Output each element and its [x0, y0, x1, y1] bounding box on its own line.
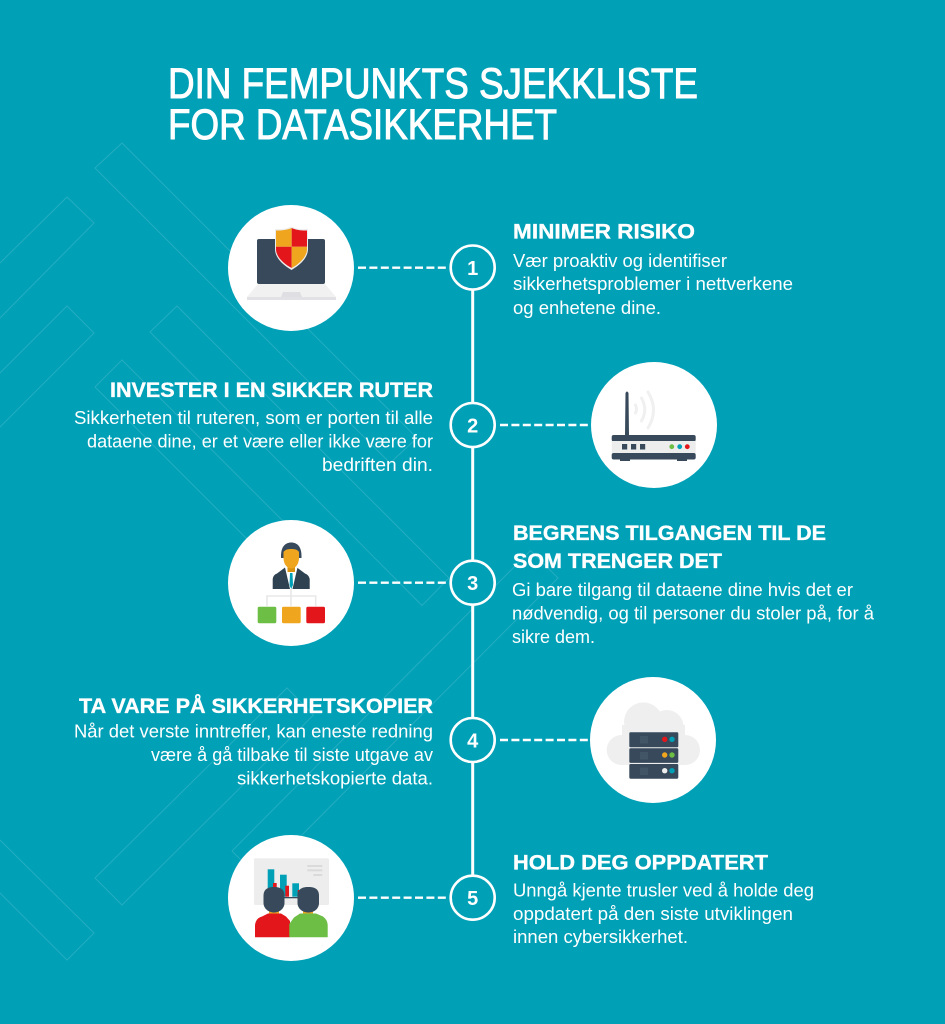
number badge 5: 5	[467, 888, 478, 910]
body: step 1	[513, 251, 793, 318]
number badge 3	[451, 561, 495, 605]
body: step 1: og enhetene dine.	[513, 298, 661, 318]
number badge 3: 3	[467, 573, 478, 595]
body: step 3: sikre dem.	[512, 627, 595, 647]
number badge 5	[451, 876, 495, 920]
heading: begrens tilgangen: BEGRENS TILGANGEN TIL DE	[513, 522, 826, 545]
timeline line	[471, 288, 474, 878]
number badge 4: 4	[467, 730, 479, 752]
body: step 2: bedriften din.	[322, 455, 433, 475]
body: step 1: sikkerhetsproblemer i nettverkene	[513, 274, 793, 294]
heading: begrens tilgangen: SOM TRENGER DET	[513, 550, 722, 573]
heading: invester i en sikker ruter: INVESTER I EN SIKKER RUTER	[110, 379, 433, 402]
step 5: text	[513, 851, 814, 947]
title: DIN FEMPUNKTS SJEKKLISTE	[168, 60, 698, 108]
number badge 1	[451, 246, 495, 290]
icon: manager with hierarchy	[228, 520, 354, 646]
body: step 4: være å gå tilbake til siste utgave av	[151, 745, 433, 765]
step 2 connector	[500, 424, 588, 426]
heading: ta vare på sikkerhetskopier: TA VARE PÅ SIKKERHETSKOPIER	[79, 694, 433, 718]
step 4: text	[74, 694, 433, 788]
body: step 3	[512, 580, 875, 647]
step 3 connector	[358, 582, 446, 584]
number badge 2: 2	[467, 416, 478, 438]
body: step 3: nødvendig, og til personer du stoler på, for å	[512, 604, 875, 624]
number badge 2	[451, 403, 495, 447]
body: step 1: Vær proaktiv og identifiser	[513, 251, 727, 271]
heading: minimer risiko: MINIMER RISIKO	[513, 220, 695, 244]
body: step 5: oppdatert på den siste utviklingen	[513, 904, 793, 924]
heading: begrens tilgangen	[513, 522, 826, 573]
icon: laptop with shield	[228, 205, 354, 331]
icon: cloud server	[590, 677, 716, 803]
title	[168, 60, 698, 149]
body: step 2: dataene dine, er et være eller ikke være for	[87, 432, 433, 452]
body: step 4	[74, 722, 433, 788]
body: step 5	[513, 881, 814, 947]
step 1: text	[513, 220, 793, 318]
body: step 5: Unngå kjente trusler ved å holde deg	[513, 881, 814, 901]
body: step 2: Sikkerheten til ruteren, som er porten til alle	[74, 408, 433, 428]
step 5 connector	[358, 897, 446, 899]
body: step 2	[74, 408, 433, 475]
number badge 4	[451, 718, 495, 762]
icon: router	[591, 362, 717, 488]
step 1 connector	[358, 267, 446, 269]
body: step 5: innen cybersikkerhet.	[513, 927, 688, 947]
step 4 connector	[500, 739, 588, 741]
number badge 1: 1	[467, 258, 478, 280]
body: step 3: Gi bare tilgang til dataene dine hvis det er	[512, 580, 853, 600]
step 3: text	[512, 522, 875, 647]
body: step 4: sikkerhetskopierte data.	[237, 768, 433, 788]
title: FOR DATASIKKERHET	[168, 101, 557, 149]
body: step 4: Når det verste inntreffer, kan eneste redning	[74, 722, 433, 742]
icon: people at presentation	[228, 835, 354, 961]
step 2: text	[74, 379, 433, 475]
heading: hold deg oppdatert: HOLD DEG OPPDATERT	[513, 851, 768, 874]
